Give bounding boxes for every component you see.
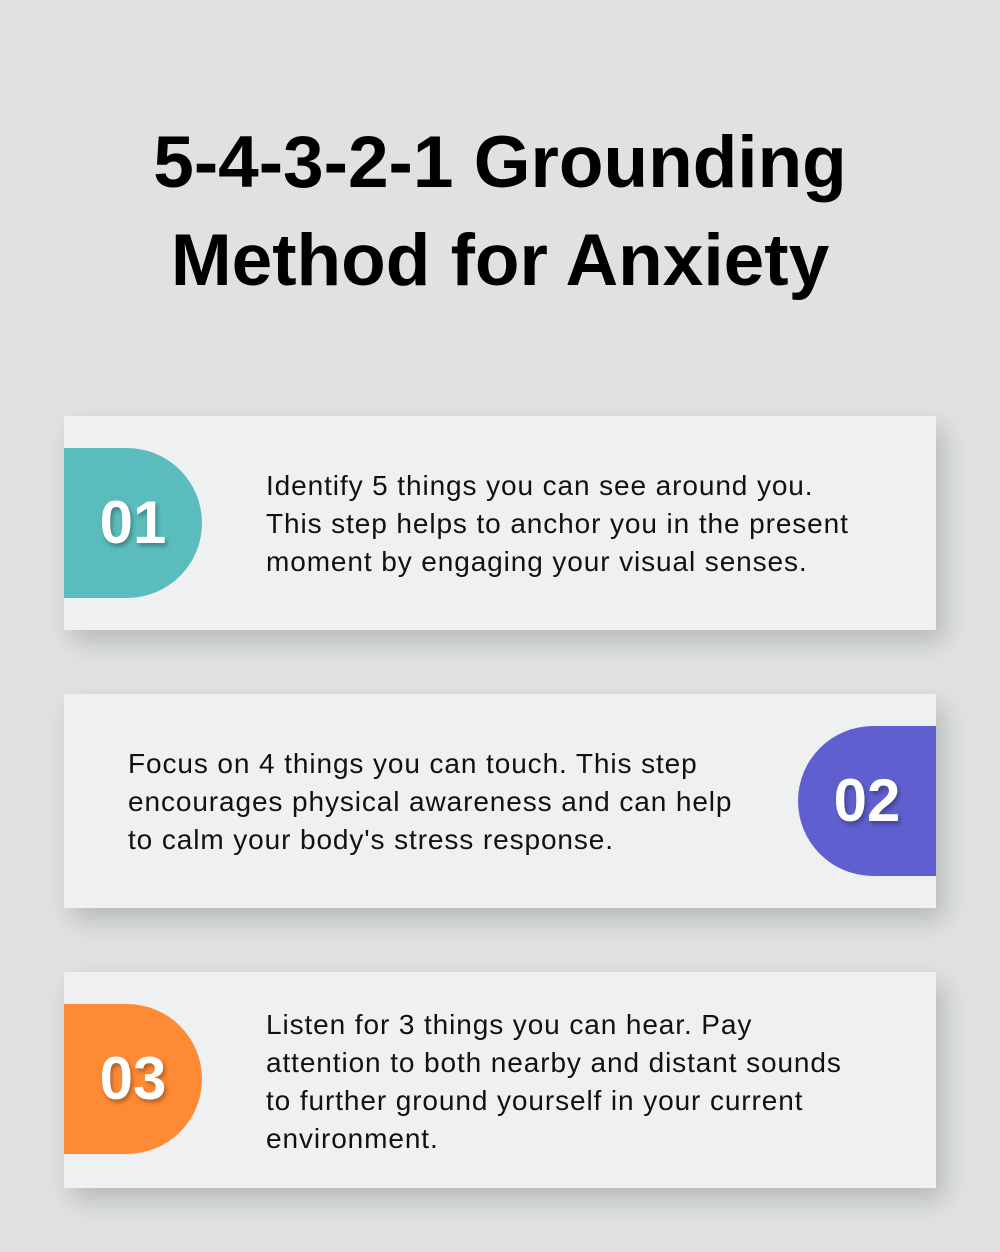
title: Method for Anxiety [171,220,829,301]
panel: step 02 [64,694,936,908]
text: step 03 [266,1009,842,1154]
text: step 03: environment. [266,1123,439,1154]
badge: 01 [64,448,202,598]
text: step 01: This step helps to anchor you in the present [266,508,849,539]
badge: 02 [798,726,936,876]
text: step 03: to further ground yourself in your current [266,1085,803,1116]
badge: 03: 03 [100,1045,166,1112]
text: step 01: Identify 5 things you can see around you. [266,470,813,501]
text: step 02: Focus on 4 things you can touch. This step [128,748,698,779]
text: step 01: moment by engaging your visual senses. [266,546,808,577]
panel: step 01 [64,416,936,630]
text: step 03: Listen for 3 things you can hear. Pay [266,1009,752,1040]
panel: step 03 [64,972,936,1188]
title [153,122,847,301]
badge: 03 [64,1004,202,1154]
badge: 01: 01 [100,489,166,556]
text: step 01 [266,470,849,577]
text: step 02: to calm your body's stress response. [128,824,614,855]
badge: 02: 02 [834,767,900,834]
text: step 02: encourages physical awareness and can help [128,786,732,817]
text: step 03: attention to both nearby and distant sounds [266,1047,842,1078]
text: step 02 [128,748,732,855]
title: 5-4-3-2-1 Grounding [153,122,847,203]
